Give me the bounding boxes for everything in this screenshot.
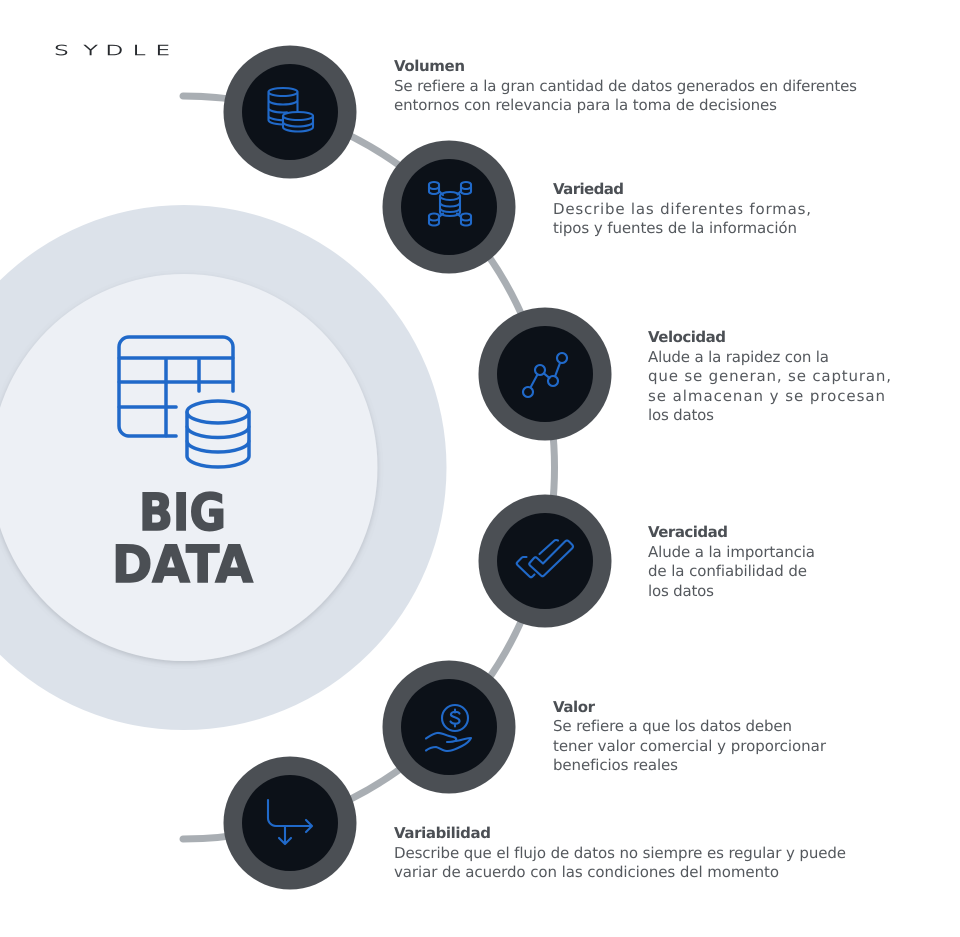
icon: table with database bbox=[119, 337, 249, 467]
icon: branching arrows bbox=[268, 800, 312, 844]
text: Variabilidad: Variabilidad bbox=[394, 824, 491, 842]
node: Variedad bbox=[382, 140, 516, 274]
text: Variedad: tipos y fuentes de la información bbox=[553, 219, 797, 237]
node: Veracidad bbox=[478, 494, 612, 628]
text: Valor: tener valor comercial y proporcionar bbox=[553, 737, 827, 755]
text: Veracidad: los datos bbox=[648, 582, 714, 600]
icon: connected databases bbox=[429, 182, 471, 226]
text: Veracidad bbox=[648, 523, 815, 600]
text: Velocidad: que se generan, se capturan, bbox=[648, 367, 891, 385]
title: BIG DATA bbox=[112, 484, 253, 595]
text: Valor: Valor bbox=[553, 698, 596, 716]
node: Variabilidad bbox=[224, 756, 356, 890]
connecting arc bbox=[183, 96, 554, 839]
text: Valor bbox=[553, 698, 827, 774]
title: BIG DATA: DATA bbox=[112, 536, 253, 595]
logo: SYDLE: SYDLE bbox=[54, 43, 170, 59]
text: Valor: beneficios reales bbox=[553, 756, 678, 774]
text: Velocidad: Alude a la rapidez con la bbox=[648, 348, 829, 366]
text: Variedad: Variedad bbox=[553, 180, 624, 198]
text: Velocidad bbox=[648, 328, 891, 424]
text: Veracidad: Alude a la importancia bbox=[648, 543, 815, 561]
text: Variabilidad: Describe que el flujo de datos no siempre es regular y puede bbox=[394, 844, 846, 862]
text: Variedad: Describe las diferentes formas, bbox=[553, 200, 811, 218]
text: Volumen: Se refiere a la gran cantidad de datos generados en diferentes bbox=[394, 77, 857, 95]
icon: double check bbox=[517, 540, 573, 577]
node: Velocidad bbox=[478, 308, 612, 440]
text: Velocidad: Velocidad bbox=[648, 328, 726, 346]
node: Volumen bbox=[224, 46, 356, 178]
text: Velocidad: los datos bbox=[648, 406, 714, 424]
text: Variedad bbox=[553, 180, 811, 237]
text: Volumen: Volumen bbox=[394, 57, 465, 75]
title: BIG DATA: BIG bbox=[139, 484, 226, 543]
text: Valor: Se refiere a que los datos deben bbox=[553, 717, 792, 735]
text: Veracidad: Veracidad bbox=[648, 523, 728, 541]
node: Valor bbox=[382, 660, 516, 794]
text: Volumen bbox=[394, 57, 857, 114]
text: Variabilidad: variar de acuerdo con las condiciones del momento bbox=[394, 863, 779, 881]
central circle: inner disc bbox=[0, 274, 378, 661]
icon: line chart bbox=[523, 353, 567, 397]
central circle: outer ring bbox=[0, 205, 446, 730]
text: Veracidad: de la confiabilidad de bbox=[648, 562, 807, 580]
icon: hand holding coin bbox=[426, 705, 471, 751]
text: Volumen: entornos con relevancia para la toma de decisiones bbox=[394, 96, 777, 114]
text: Variabilidad bbox=[394, 824, 846, 881]
text: Velocidad: se almacenan y se procesan bbox=[648, 387, 885, 405]
icon: stacked databases bbox=[268, 88, 313, 132]
